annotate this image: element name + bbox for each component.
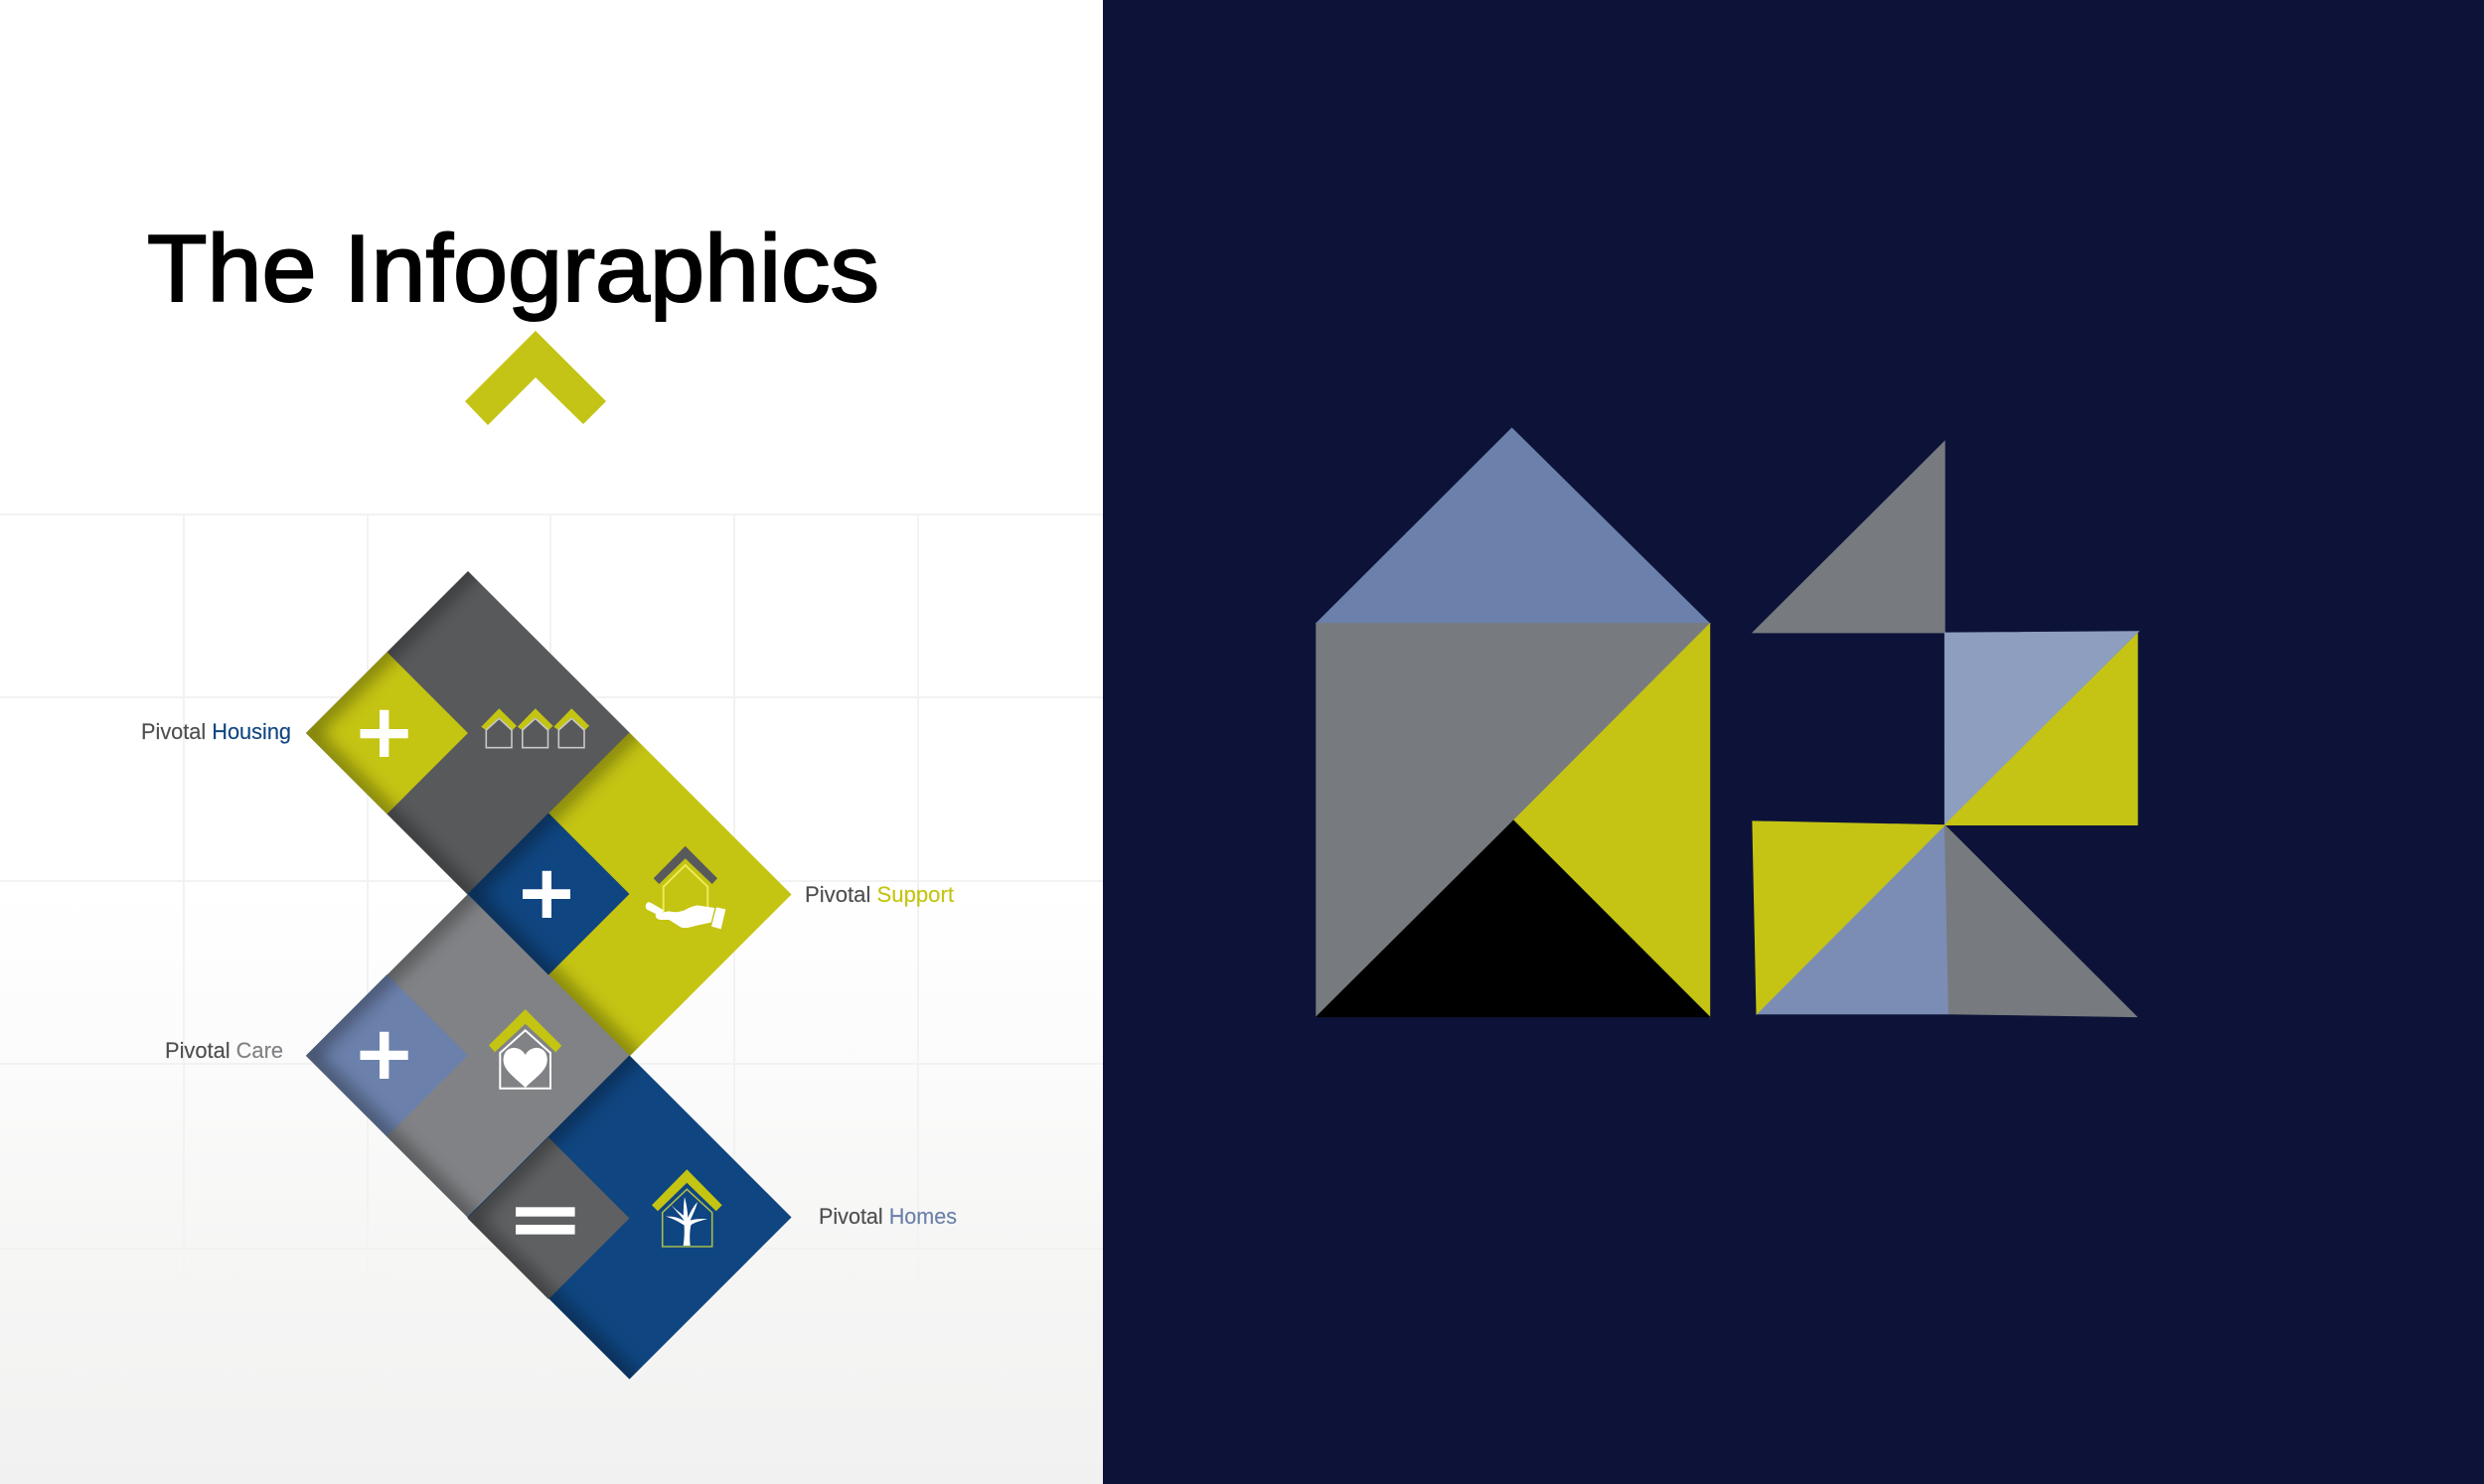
diamond: dark grey housing — [306, 571, 630, 894]
icon: house with tree — [652, 1169, 722, 1247]
icon: title chevron — [465, 331, 606, 425]
label: Pivotal Homes: Pivotal Homes — [819, 1204, 957, 1229]
icon: plus on yellow — [360, 710, 408, 757]
icon: three houses — [481, 708, 589, 748]
diamond: blue plus — [467, 813, 630, 975]
panel: diamond diagram — [306, 571, 791, 1379]
label: Pivotal Housing: Pivotal Housing — [141, 719, 291, 744]
diamond: grey equals — [467, 1137, 630, 1299]
diamond: periwinkle plus — [306, 974, 468, 1136]
title: The Infographics — [147, 216, 879, 322]
logo: large house — [1317, 428, 1710, 1017]
diamond: yellow plus — [306, 652, 468, 815]
diamond: navy homes — [467, 1055, 791, 1379]
icon: house in hand — [646, 846, 725, 929]
icon: house with heart — [489, 1009, 561, 1089]
panel: right navy background — [1103, 0, 2484, 1484]
panel: left background — [0, 0, 1103, 1484]
logo: pinwheel of triangles — [1753, 441, 2138, 1017]
label: Pivotal Care: Pivotal Care — [165, 1038, 283, 1063]
icon: equals — [516, 1207, 575, 1235]
icon: plus on periwinkle — [360, 1032, 408, 1079]
label: Pivotal Support: Pivotal Support — [805, 882, 954, 907]
icon: plus on blue — [523, 871, 570, 918]
diamond: yellow support — [467, 733, 791, 1056]
diamond: grey care — [306, 894, 630, 1218]
